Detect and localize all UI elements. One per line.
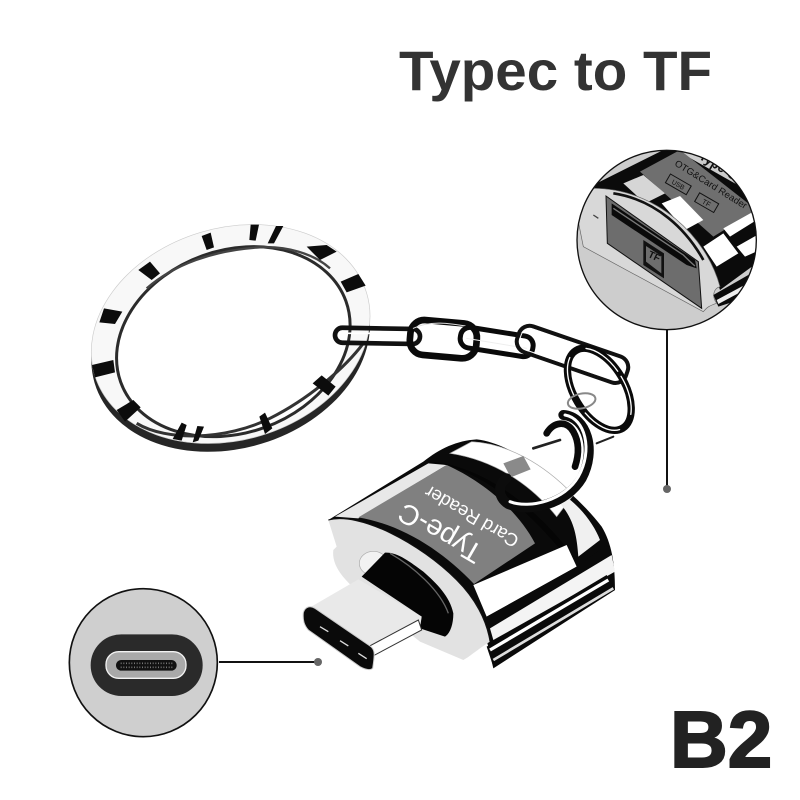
front face xyxy=(328,519,490,660)
chain link 2 xyxy=(409,319,478,360)
model text: Type-C xyxy=(696,148,740,184)
Type-C plug xyxy=(308,579,422,650)
USB badge xyxy=(665,174,691,195)
icon: card reader body xyxy=(303,439,615,670)
small jump ring xyxy=(566,391,597,411)
callout: TF slot detail xyxy=(577,147,770,330)
TF mark xyxy=(643,240,664,278)
chain link 3 xyxy=(459,326,534,358)
chain link 1 xyxy=(335,328,420,344)
icon: key ring xyxy=(64,191,397,485)
OTG text: OTG&Card Reader xyxy=(673,158,749,211)
TF badge xyxy=(695,193,719,212)
reader top surface xyxy=(594,151,756,290)
product text: Type-C: Type-C xyxy=(393,496,488,569)
lobster clasp xyxy=(500,415,613,507)
reader shell xyxy=(328,439,615,668)
card slot xyxy=(612,203,697,268)
slot panel xyxy=(606,196,702,308)
leader line: TF callout xyxy=(663,330,671,493)
leader line: USB-C callout xyxy=(219,658,322,666)
label: B2: B2 xyxy=(670,695,772,784)
top strip xyxy=(335,463,447,518)
lower rail xyxy=(487,575,615,667)
side rail xyxy=(713,274,749,307)
product text: Card Reader: Card Reader xyxy=(421,481,522,552)
callout: USB-C port detail xyxy=(69,589,217,737)
label panel xyxy=(358,465,535,584)
TF mark: TF xyxy=(646,249,662,265)
right side bands xyxy=(473,545,577,617)
chain link 4 xyxy=(514,323,631,386)
icon: chain and clasp xyxy=(335,319,644,507)
front face xyxy=(577,188,720,312)
TF badge: TF xyxy=(700,197,713,209)
title: Typec to TF xyxy=(399,39,712,102)
connector neck xyxy=(362,553,453,637)
USB badge: USB xyxy=(670,179,686,192)
split ring xyxy=(554,337,644,441)
connector collar xyxy=(359,551,387,575)
